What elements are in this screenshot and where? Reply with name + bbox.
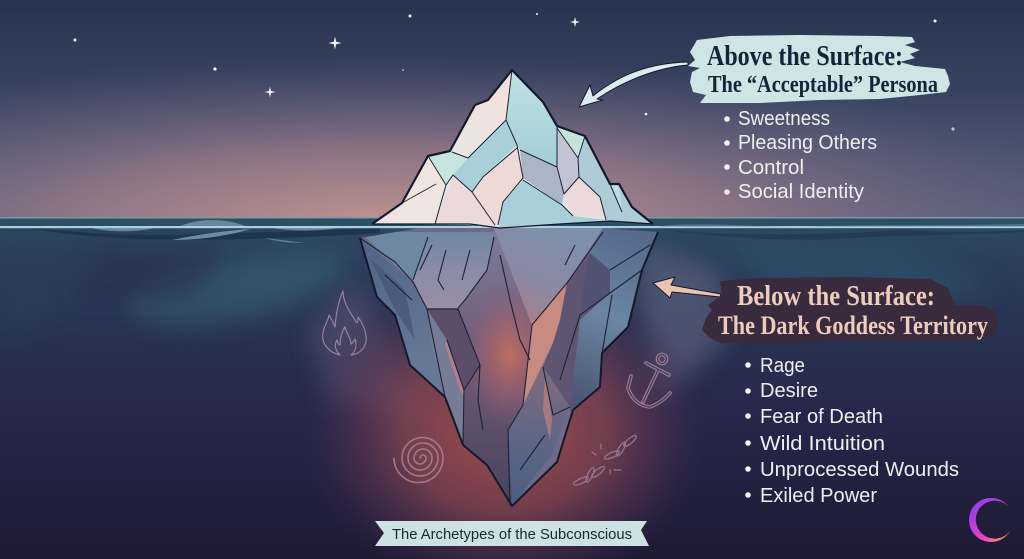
caption text: The Archetypes of the Subconscious xyxy=(392,526,632,543)
arrow: above the surface xyxy=(579,62,688,107)
list: below the surface: Rage xyxy=(760,355,805,377)
list: below the surface: Exiled Power xyxy=(760,485,877,507)
list: below the surface: Wild Intuition xyxy=(760,433,885,455)
heading lines: Above the Surface: xyxy=(707,40,903,72)
arrow: below the surface xyxy=(653,277,721,298)
icon: anchor xyxy=(628,354,670,407)
heading: above the surface: The “Acceptable” Persona xyxy=(708,72,938,98)
list: below the surface: Desire xyxy=(760,380,818,402)
heading lines: Below the Surface: xyxy=(737,280,935,312)
list: below the surface xyxy=(745,355,959,507)
list: above the surface: Sweetness xyxy=(738,108,830,130)
stars xyxy=(74,13,955,131)
heading: below the surface xyxy=(702,277,998,343)
brush banner xyxy=(688,35,950,103)
crack lines xyxy=(360,232,650,506)
iceberg above the surface xyxy=(372,70,653,228)
facets xyxy=(452,70,512,158)
brush banner xyxy=(702,277,998,343)
heading: above the surface xyxy=(688,35,950,103)
icon: flame xyxy=(323,291,366,355)
list: above the surface: Social Identity xyxy=(738,181,864,203)
list: below the surface: Fear of Death xyxy=(760,406,883,428)
list: below the surface: Unprocessed Wounds xyxy=(760,459,959,481)
logo xyxy=(969,498,1010,542)
list: above the surface: Pleasing Others xyxy=(738,132,877,154)
icon: broken chain xyxy=(573,434,638,487)
center facet with inner glow xyxy=(460,229,526,504)
iceberg below the surface xyxy=(360,228,658,506)
background: ocean xyxy=(0,218,1024,559)
list: above the surface xyxy=(724,108,877,203)
facet lines xyxy=(402,70,622,225)
outline xyxy=(360,232,658,506)
list: above the surface: Control xyxy=(738,157,804,179)
icon: spiral xyxy=(394,438,443,482)
caption ribbon xyxy=(375,521,649,546)
background: night sky xyxy=(0,0,1024,220)
water surface xyxy=(0,217,1024,243)
